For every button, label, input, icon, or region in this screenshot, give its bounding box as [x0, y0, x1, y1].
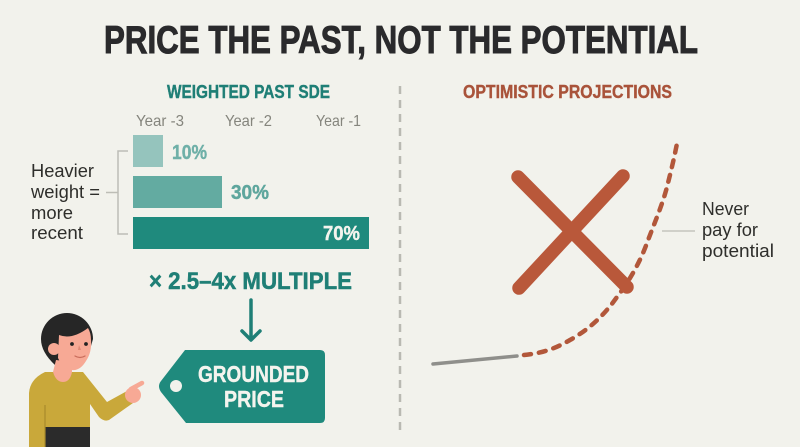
icon: person pointing	[29, 313, 142, 447]
label: heavier weight: more	[31, 203, 73, 223]
price tag: PRICE	[224, 386, 284, 412]
price tag: GROUNDED	[198, 361, 309, 387]
label: heavier weight	[30, 161, 100, 243]
year labels: Year -1	[316, 113, 361, 130]
bar: year -1, 70%	[133, 217, 369, 249]
year labels: Year -3	[136, 113, 184, 130]
callout: never pay for potential: potential	[702, 241, 774, 261]
label: heavier weight: Heavier	[31, 161, 94, 181]
line: past actual	[433, 356, 517, 364]
multiple label: × 2.5–4x MULTIPLE	[149, 268, 352, 295]
year labels	[136, 113, 361, 130]
heading: weighted past SDE: WEIGHTED PAST SDE	[167, 82, 330, 102]
callout: never pay for potential: pay for	[702, 220, 758, 240]
callout line	[662, 230, 695, 232]
callout: never pay for potential	[702, 199, 774, 261]
heading: optimistic projections: OPTIMISTIC PROJECTIONS	[463, 82, 672, 102]
callout: never pay for potential: Never	[702, 199, 749, 219]
icon: red cross	[518, 176, 627, 288]
year labels: Year -2	[225, 113, 272, 130]
label: heavier weight: recent	[31, 223, 83, 243]
panel: weighted past SDE	[29, 82, 369, 447]
bar: year -1, 70%: 70%	[323, 223, 360, 245]
price tag	[159, 350, 325, 423]
bar: year -2, 30%	[133, 176, 269, 208]
bracket	[106, 151, 128, 234]
bar: year -3, 10%: 10%	[172, 142, 207, 164]
bar: year -3, 10%	[133, 135, 207, 167]
line: dashed projection	[524, 138, 678, 355]
panel: optimistic projections	[433, 82, 774, 364]
arrow: down to price	[242, 300, 260, 340]
bar: year -2, 30%: 30%	[231, 182, 269, 204]
label: heavier weight: weight =	[30, 182, 100, 202]
